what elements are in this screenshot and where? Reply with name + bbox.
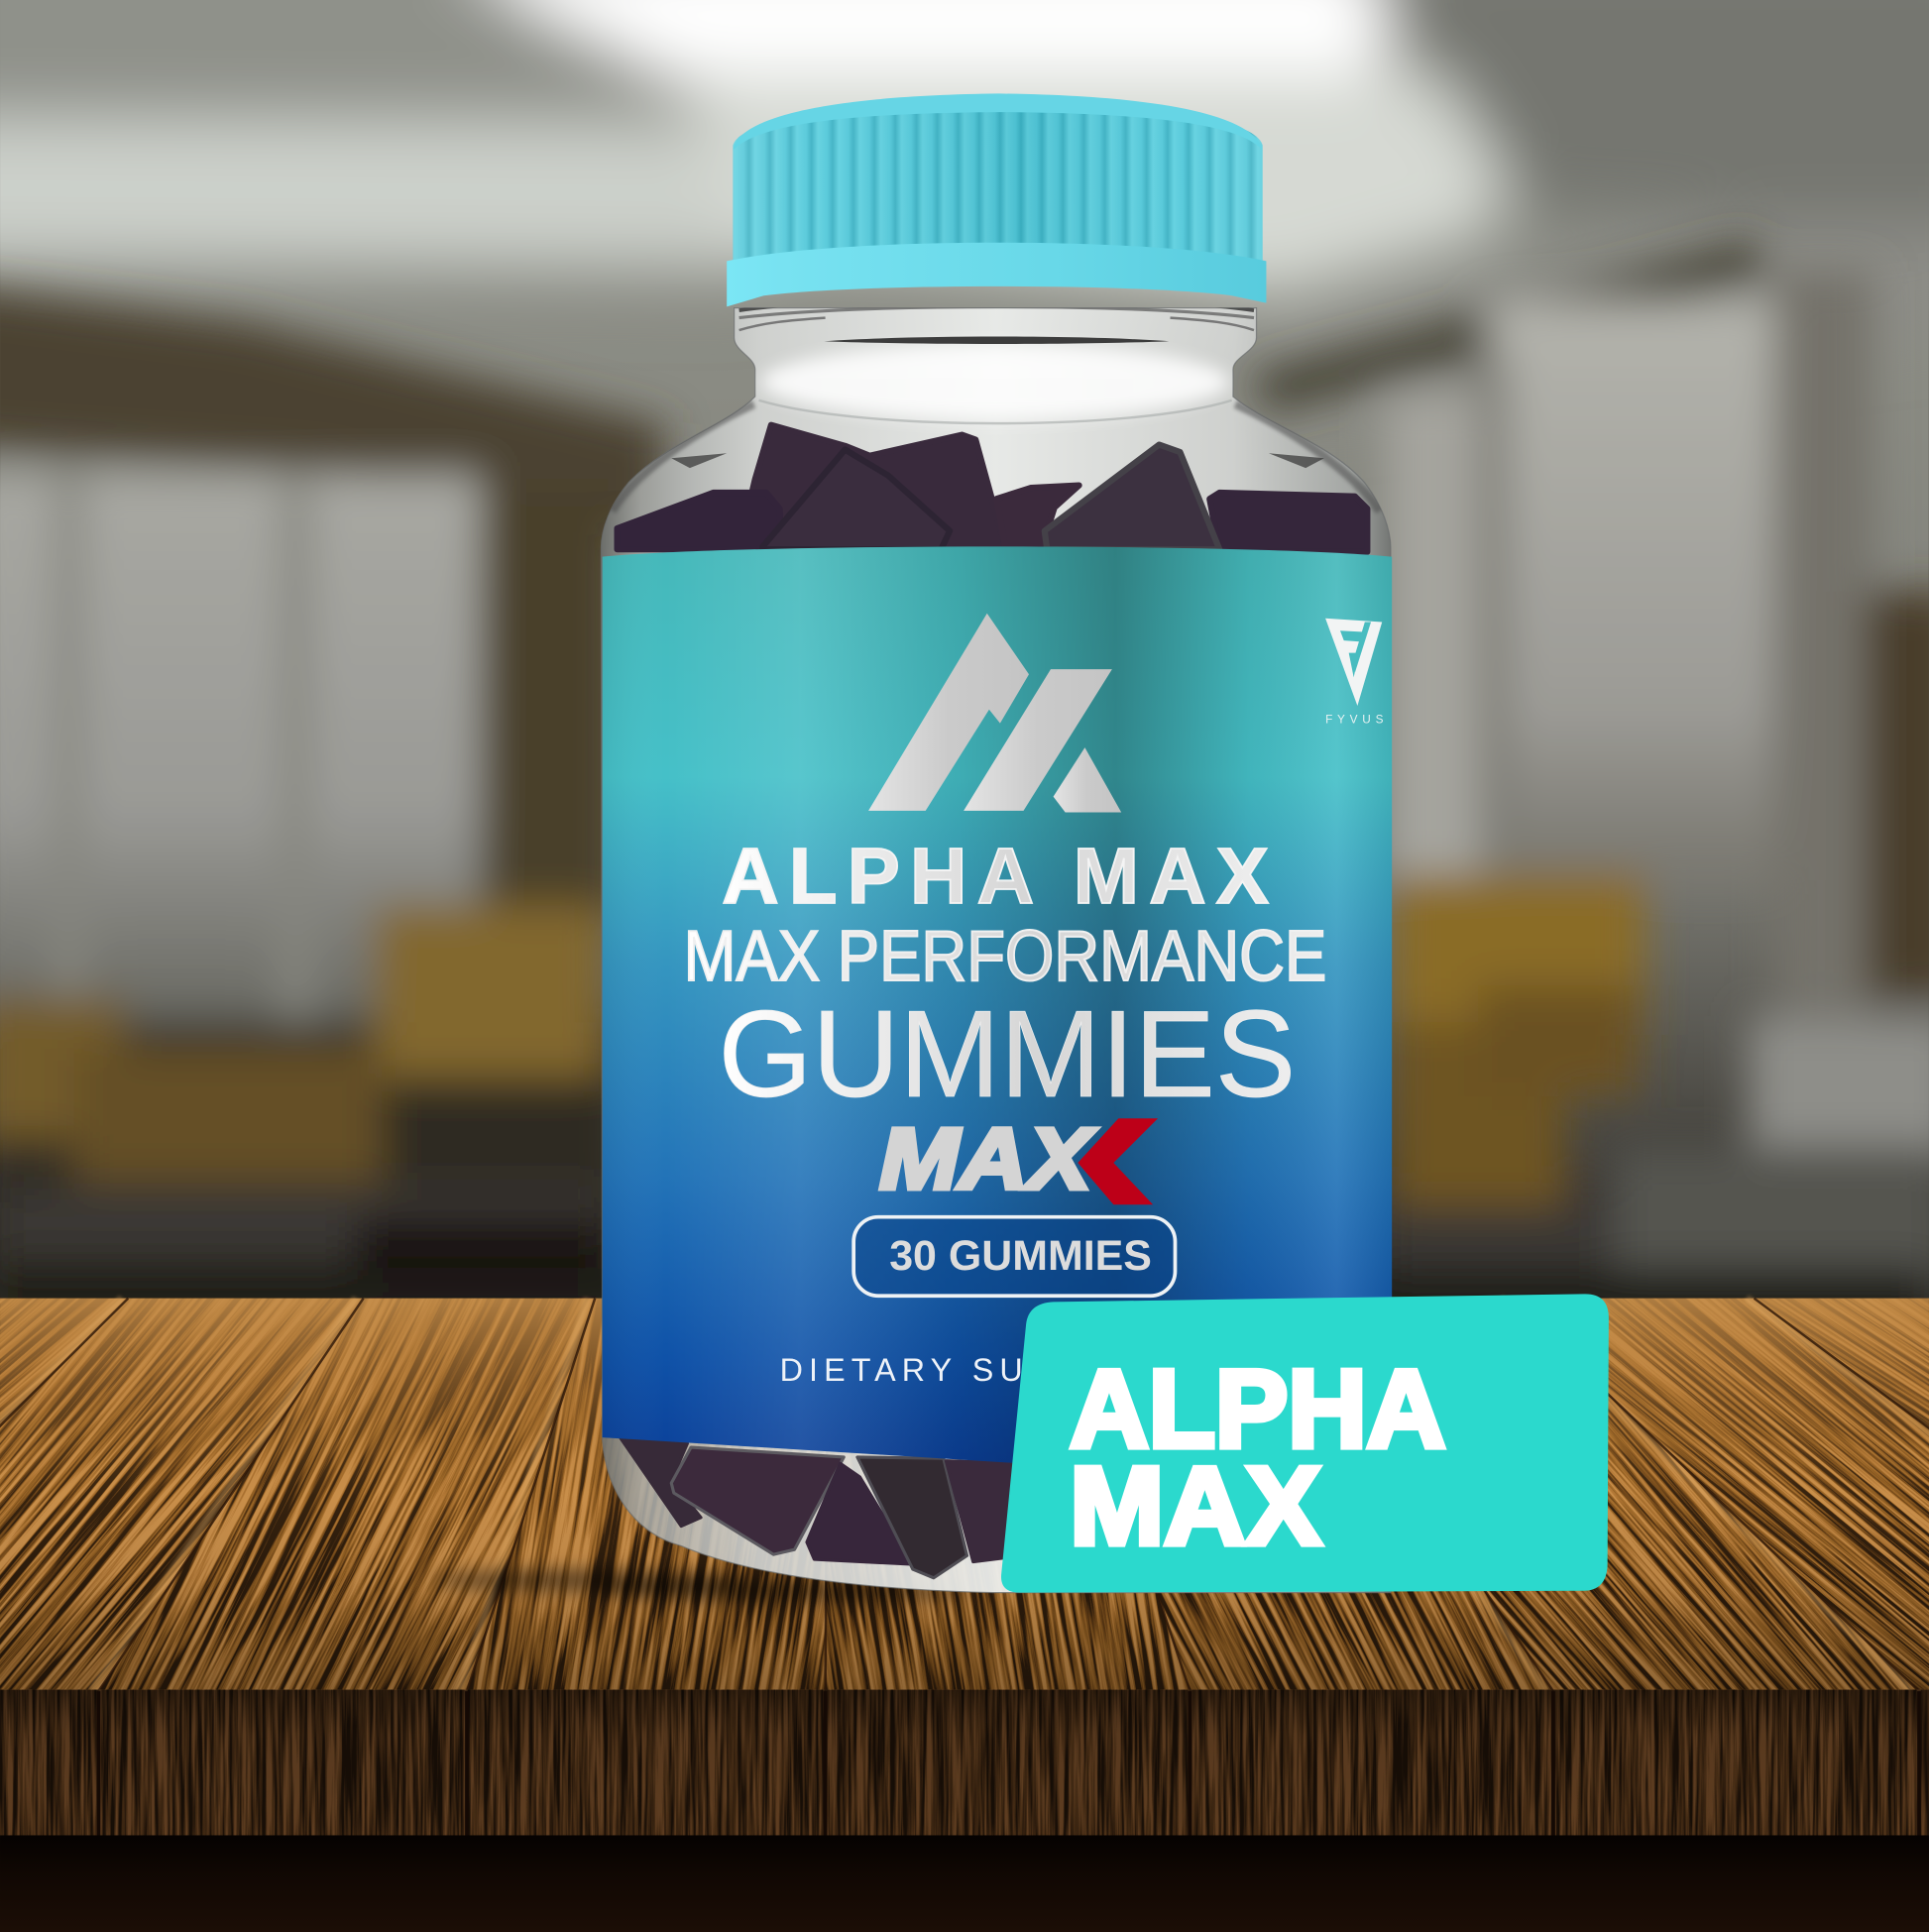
cap collar [727, 243, 1266, 306]
label background [603, 546, 1392, 1468]
fyvus logo [1325, 619, 1384, 726]
cap [727, 93, 1266, 306]
fyvus logo: FYVUS [1325, 712, 1384, 726]
badge text max: MAX [1070, 1444, 1321, 1568]
cap top rim [733, 93, 1263, 151]
gummies upper [618, 425, 1367, 552]
count pill: 30 GUMMIES [889, 1232, 1152, 1279]
label [603, 546, 1392, 1468]
product type: GUMMIES [718, 986, 1296, 1123]
max logo [879, 1111, 1158, 1207]
max logo: MAX [879, 1111, 1097, 1207]
glass neck and shoulder highlights [613, 297, 1380, 511]
wooden table top [0, 1299, 1929, 1692]
brand mountain logo [868, 614, 1121, 812]
bottle [601, 93, 1392, 1593]
blurred interior background [0, 0, 1929, 1318]
badge text alpha: ALPHA [1070, 1346, 1445, 1470]
gummies lower [619, 1435, 1022, 1578]
cap ribbed side [733, 103, 1263, 264]
product line: MAX PERFORMANCE [684, 917, 1326, 996]
bottle shadow on table [431, 1569, 973, 1603]
glass body [601, 308, 1391, 1593]
count pill [853, 1217, 1175, 1296]
alpha max badge [1001, 1294, 1609, 1593]
brand name: ALPHA MAX [722, 832, 1269, 920]
wooden table front edge [0, 1690, 1929, 1932]
supplement text: DIETARY SUPPLEMENT [780, 1352, 1250, 1388]
